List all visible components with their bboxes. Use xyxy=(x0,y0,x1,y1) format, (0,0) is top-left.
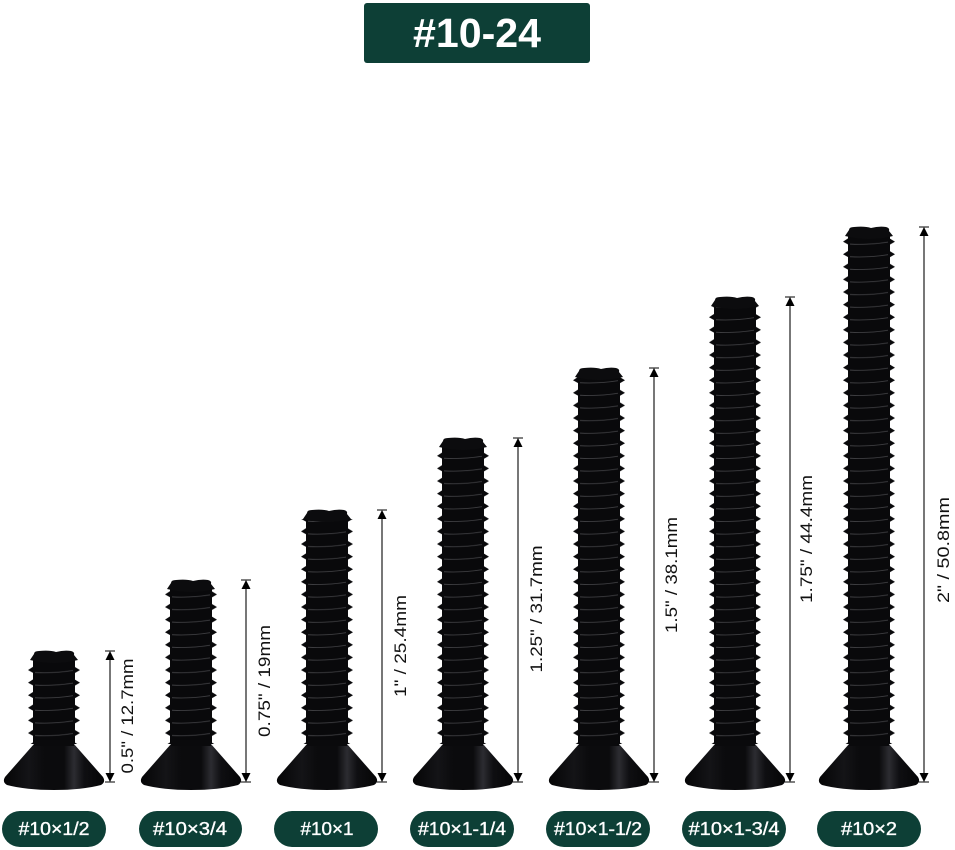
screw 1-3/4 inch xyxy=(685,297,785,790)
screw 2 inch xyxy=(819,227,919,790)
dimension label 1.5 inch: 1.5" / 38.1mm xyxy=(662,517,681,633)
size pill 1-1/4: #10×1-1/4 xyxy=(418,819,506,839)
dimension arrow 0.5 inch xyxy=(105,651,115,782)
screw 1-1/4 inch xyxy=(413,438,513,790)
dimension arrow 0.75 inch xyxy=(241,580,251,782)
dimension label 0.5 inch: 0.5" / 12.7mm xyxy=(118,658,137,774)
size pill 1-1/4 xyxy=(410,811,514,847)
size pill 1/2: #10×1/2 xyxy=(18,819,90,839)
size pill 3/4 xyxy=(139,811,242,847)
dimension label 1.75 inch: 1.75" / 44.4mm xyxy=(797,475,816,603)
screw 1/2 inch xyxy=(4,651,104,790)
dimension label 1.25 inch: 1.25" / 31.7mm xyxy=(527,546,546,672)
size pill 2 xyxy=(817,811,921,847)
title badge xyxy=(364,3,590,63)
size pill 1-3/4 xyxy=(682,811,786,847)
dimension arrow 1.5 inch xyxy=(649,368,659,782)
dimension arrow 1 inch xyxy=(377,510,387,782)
size pill 1-1/2 xyxy=(546,811,650,847)
dimension label 2 inch: 2" / 50.8mm xyxy=(934,497,953,603)
dimension arrow 2 inch xyxy=(919,227,929,782)
dimension label 0.75 inch: 0.75" / 19mm xyxy=(255,625,274,737)
screw 1 inch xyxy=(277,510,377,790)
size pill 1 xyxy=(274,811,378,847)
screw 1-1/2 inch xyxy=(549,368,649,790)
title badge: #10-24 xyxy=(413,10,541,56)
size pill 1-3/4: #10×1-3/4 xyxy=(688,819,780,839)
size pill 3/4: #10×3/4 xyxy=(153,819,227,839)
dimension label 1 inch: 1" / 25.4mm xyxy=(391,595,410,697)
size pill 2: #10×2 xyxy=(841,819,897,839)
dimension arrow 1.25 inch xyxy=(513,438,523,782)
size pill 1/2 xyxy=(2,811,106,847)
screw 3/4 inch xyxy=(141,580,241,790)
dimension arrow 1.75 inch xyxy=(785,297,795,782)
size pill 1: #10×1 xyxy=(300,819,354,839)
size pill 1-1/2: #10×1-1/2 xyxy=(554,819,642,839)
